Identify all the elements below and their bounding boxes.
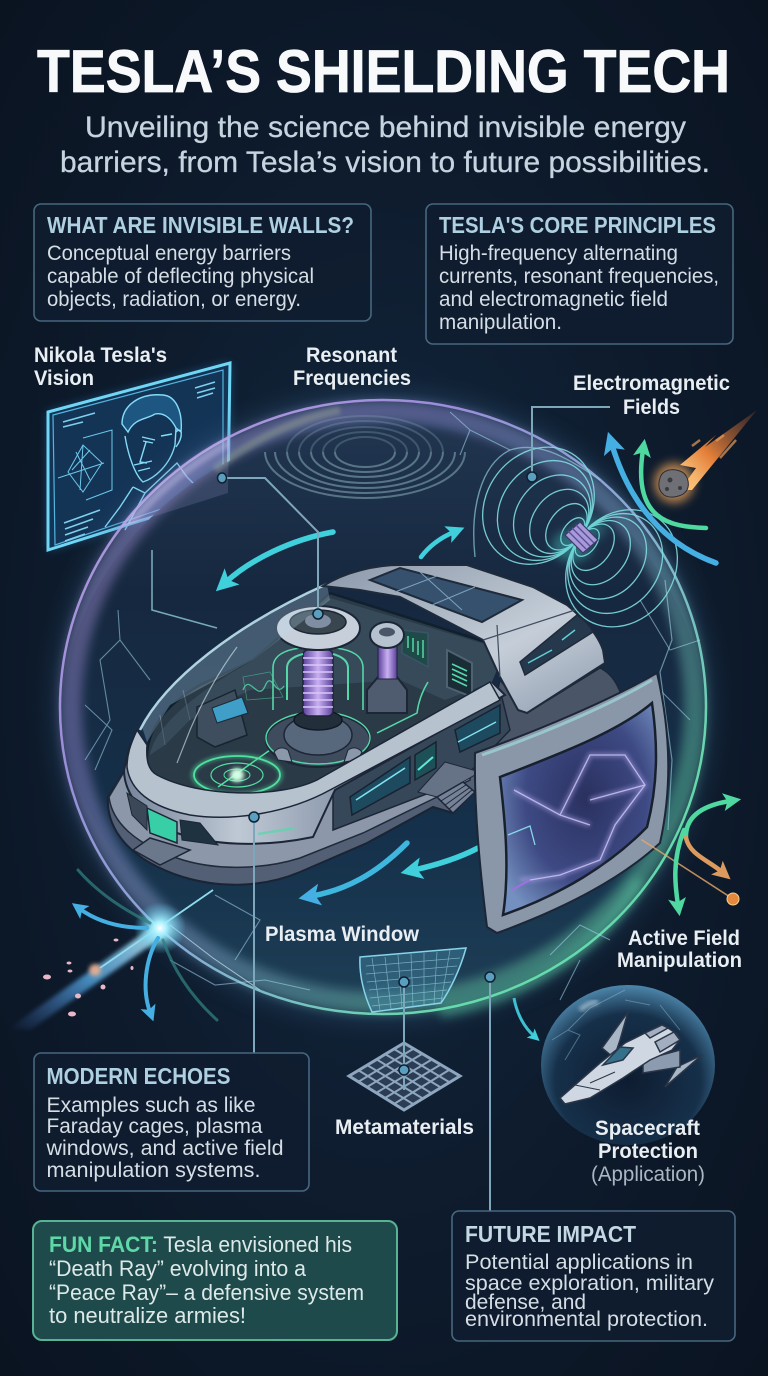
callout lines xyxy=(218,407,610,1212)
resonant frequency waves xyxy=(265,416,465,498)
label: Nikola Tesla's Vision: Vision xyxy=(34,367,94,390)
label: Spacecraft Protection: Spacecraft xyxy=(595,1117,700,1140)
hull windows xyxy=(350,757,410,815)
label: Plasma Window: Plasma Window xyxy=(265,923,420,946)
upper cabin block xyxy=(323,565,605,713)
plasma window xyxy=(475,673,668,933)
metamaterial shield patch xyxy=(360,948,466,1012)
secondary coil xyxy=(367,622,428,733)
electromagnetic field diagram xyxy=(460,425,700,649)
panel: tesla's core principles: manipulation. xyxy=(439,311,562,334)
front wall details xyxy=(147,808,177,843)
panel: tesla's core principles: currents, resonant frequencies, xyxy=(439,265,719,288)
panel: what are invisible walls: WHAT ARE INVISIBLE WALLS? xyxy=(47,212,354,238)
label: Metamaterials: Metamaterials xyxy=(335,1116,474,1139)
label: Resonant Frequencies xyxy=(293,344,411,390)
label: Resonant Frequencies: Resonant xyxy=(306,344,397,367)
panel: tesla's core principles: TESLA'S CORE PRINCIPLES xyxy=(439,212,716,238)
panel: fun fact: “Death Ray” evolving into a xyxy=(49,1256,307,1281)
panel: future impact: FUTURE IMPACT xyxy=(465,1221,636,1247)
shield overlap on hologram xyxy=(120,436,229,526)
hologram: Nikola Tesla's vision xyxy=(48,363,230,550)
panel: modern echoes: Examples such as like xyxy=(46,1094,255,1117)
label: Nikola Tesla's Vision: Nikola Tesla's xyxy=(34,344,167,367)
panel: modern echoes: MODERN ECHOES xyxy=(46,1063,230,1089)
panel: tesla's core principles: High-frequency alternating xyxy=(439,242,678,265)
label: Electromagnetic Fields: Fields xyxy=(623,396,680,419)
panel: future impact: Potential applications in xyxy=(465,1251,693,1274)
panel: tesla's core principles xyxy=(426,204,733,344)
panel: future impact: defense, and xyxy=(465,1291,586,1314)
floor target ring xyxy=(193,750,281,794)
mini spacecraft shield xyxy=(541,985,715,1145)
label: Spacecraft Protection: Protection xyxy=(598,1140,698,1163)
rim highlight band xyxy=(127,682,500,817)
roof solar panel xyxy=(370,568,522,622)
panel: modern echoes: windows, and active field xyxy=(45,1137,284,1160)
label: Electromagnetic Fields: Electromagnetic xyxy=(573,372,730,395)
deck floor xyxy=(147,593,505,795)
subtitle: Unveiling the science behind invisible energy xyxy=(85,111,686,144)
shield lightning cracks xyxy=(85,412,700,1000)
panel: modern echoes: Faraday cages, plasma xyxy=(46,1115,263,1138)
subtitle xyxy=(60,111,710,179)
metamaterial grid icon xyxy=(349,1043,460,1110)
lower wall xyxy=(333,690,510,830)
platform top xyxy=(109,750,470,867)
label: Nikola Tesla's Vision xyxy=(34,344,167,390)
wall waveform xyxy=(243,681,284,691)
label: Spacecraft Protection: (Application) xyxy=(591,1163,705,1186)
panel: what are invisible walls xyxy=(34,204,371,321)
panel: fun fact: “Peace Ray”– a defensive system xyxy=(49,1280,364,1305)
Tesla coil xyxy=(266,606,370,767)
label: Electromagnetic Fields xyxy=(573,372,730,419)
panel: modern echoes: manipulation systems. xyxy=(46,1159,260,1182)
coil xyxy=(565,522,598,553)
arrow to spacecraft xyxy=(514,998,534,1036)
silver front wall xyxy=(124,680,505,844)
portrait sketch xyxy=(105,395,203,530)
label: Active Field Manipulation xyxy=(617,927,742,972)
label: Spacecraft Protection xyxy=(591,1117,705,1186)
glass dome xyxy=(142,585,330,742)
control console xyxy=(197,690,247,747)
deflection arrows inside shield xyxy=(226,532,478,896)
panel: what are invisible walls: objects, radiation, or energy. xyxy=(47,288,301,311)
schematic diagram xyxy=(58,430,112,500)
walkway xyxy=(418,762,480,797)
panel: fun fact xyxy=(33,1221,397,1340)
spacecraft xyxy=(560,1012,702,1104)
left impact burst xyxy=(8,870,260,1030)
panel: fun fact: to neutralize armies! xyxy=(49,1303,246,1328)
panel: modern echoes xyxy=(34,1053,309,1191)
panel: future impact: environmental protection. xyxy=(465,1308,708,1331)
gray mount behind window xyxy=(480,668,625,770)
energy shield sphere xyxy=(48,363,713,1021)
back wall xyxy=(150,598,505,755)
subtitle: barriers, from Tesla’s vision to future possibilities. xyxy=(60,146,710,179)
panel: tesla's core principles: and electromagnetic field xyxy=(439,288,668,311)
wall graph screen xyxy=(402,630,428,667)
platform underside xyxy=(108,750,478,885)
label: Active Field Manipulation: Active Field xyxy=(628,927,740,950)
cabin visor xyxy=(520,615,593,675)
label: Resonant Frequencies: Frequencies xyxy=(293,367,411,390)
stairs xyxy=(437,782,475,813)
panel: what are invisible walls: capable of deflecting physical xyxy=(47,265,314,288)
label: Active Field Manipulation: Manipulation xyxy=(617,949,742,972)
top right meteor deflection xyxy=(612,410,757,563)
panel: what are invisible walls: Conceptual energy barriers xyxy=(47,242,291,265)
panel: future impact: space exploration, military xyxy=(465,1272,715,1295)
wall data screen xyxy=(447,650,472,697)
spacecraft cutaway station xyxy=(108,565,625,885)
panel: fun fact: FUN FACT: Tesla envisioned his xyxy=(49,1232,352,1257)
panel: future impact xyxy=(452,1211,735,1341)
lower right meteor deflection xyxy=(642,801,739,905)
